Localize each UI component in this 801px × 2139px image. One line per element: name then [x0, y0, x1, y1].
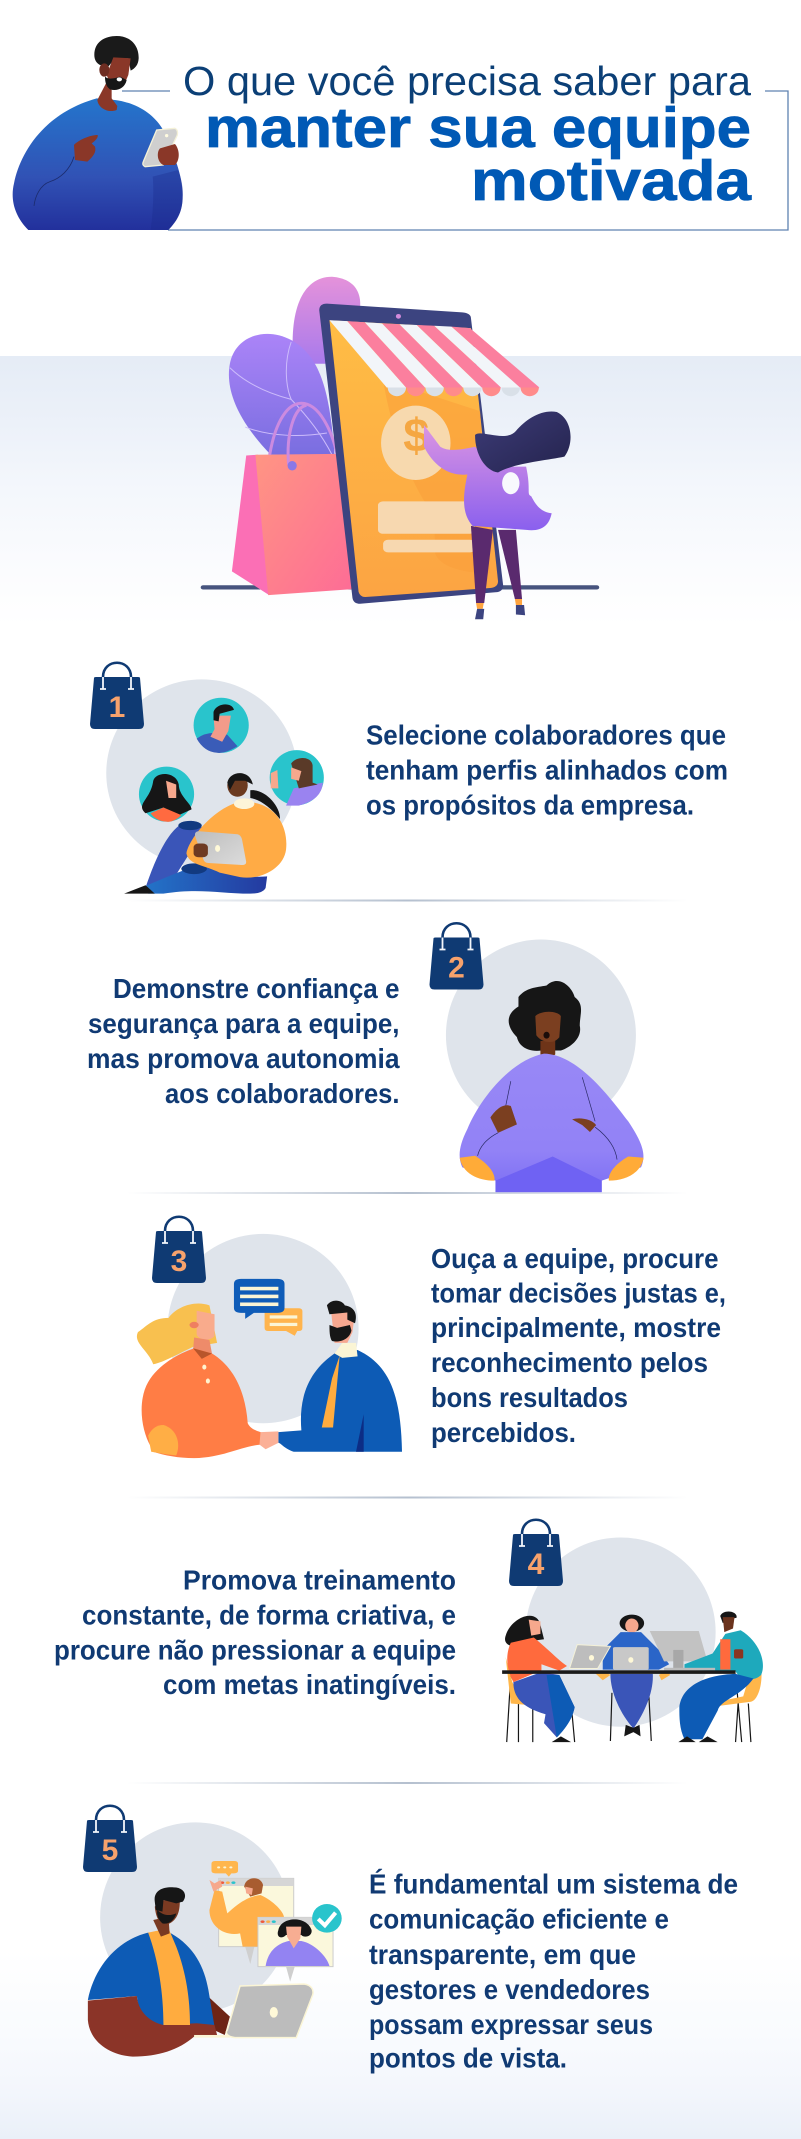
- background: top gradient band: [0, 356, 801, 626]
- step 4 text: procure não pressionar a equipe: [54, 1634, 456, 1666]
- step 1 text: os propósitos da empresa.: [366, 790, 694, 820]
- step 2 text: aos colaboradores.: [165, 1078, 400, 1109]
- title panel: [13, 36, 788, 230]
- hero illustration: online shop: [201, 277, 599, 619]
- coin: [381, 406, 451, 480]
- step 5 text: comunicação eficiente e: [369, 1904, 669, 1934]
- shopping bag: [232, 403, 352, 595]
- chat bubble: [211, 1861, 238, 1877]
- step 2 text: Demonstre confiança e: [113, 973, 400, 1004]
- step 3 text: [431, 1243, 726, 1448]
- pink leaf: [293, 277, 360, 364]
- divider 2: [127, 1192, 688, 1194]
- background: bottom gradient band: [0, 1950, 801, 2139]
- step 1 text: [366, 720, 728, 820]
- panel: step 1: [90, 663, 728, 894]
- panel: step 5: [83, 1806, 738, 2074]
- step 4 text: Promova treinamento: [183, 1564, 456, 1596]
- step 2 text: mas promova autonomia: [87, 1043, 400, 1074]
- step 1 text: tenham perfis alinhados com: [366, 754, 728, 786]
- purple leaf: [229, 334, 335, 455]
- step 4 text: com metas inatingíveis.: [163, 1669, 456, 1700]
- step 5 text: transparente, em que: [369, 1939, 636, 1970]
- step 5 text: É fundamental um sistema de: [369, 1868, 738, 1900]
- illustration: team at table: [502, 1537, 763, 1742]
- divider 3: [127, 1496, 688, 1498]
- phone storefront: [319, 304, 539, 604]
- icon: bag number 1: 1: [109, 691, 125, 724]
- icon: bag number 5: 5: [102, 1834, 118, 1867]
- step 3 text: principalmente, mostre: [431, 1312, 721, 1343]
- step 1 text: Selecione colaboradores que: [366, 720, 726, 750]
- ground line: [201, 585, 599, 590]
- panel: step 4: [54, 1520, 763, 1742]
- striped awning: [329, 320, 539, 396]
- step 2 text: segurança para a equipe,: [88, 1008, 400, 1039]
- icon: bag number 4: 4: [528, 1548, 545, 1581]
- illustration: team profiles: [106, 679, 324, 894]
- divider 4: [127, 1782, 688, 1784]
- screen cards: [378, 501, 475, 552]
- icon: bag number 2: 2: [448, 952, 465, 984]
- icon: bag number 2: [430, 923, 484, 990]
- speech bubbles: [234, 1279, 302, 1336]
- panel: step 3: [137, 1217, 726, 1458]
- step 4 text: constante, de forma criativa, e: [82, 1600, 456, 1630]
- title frame: [122, 91, 788, 230]
- illustration: video call: [88, 1822, 342, 2057]
- step 4 text: [54, 1564, 456, 1700]
- step 2 text: [87, 973, 400, 1109]
- illustration: man with phone: [13, 36, 183, 230]
- divider 1: [127, 900, 688, 902]
- woman touching screen: [424, 412, 571, 619]
- step 3 text: bons resultados: [431, 1382, 628, 1413]
- step 5 text: [369, 1868, 738, 2074]
- panel: step 2: [87, 923, 644, 1192]
- title line 2: manter sua equipe: [205, 96, 751, 160]
- icon: bag number 3: 3: [171, 1245, 187, 1278]
- step 3 text: tomar decisões justas e,: [431, 1278, 726, 1308]
- step 3 text: reconhecimento pelos: [431, 1347, 708, 1378]
- illustration: woman arms crossed: [446, 940, 644, 1192]
- coin: $: [403, 408, 429, 462]
- title line 3: motivada: [471, 149, 752, 213]
- illustration: handshake: [137, 1234, 402, 1458]
- step 5 text: gestores e vendedores: [369, 1974, 650, 2005]
- check badge: [312, 1904, 342, 1933]
- icon: bag number 4: [509, 1520, 563, 1586]
- title line 1: O que você precisa saber para: [183, 58, 751, 104]
- step 3 text: percebidos.: [431, 1417, 576, 1448]
- step 3 text: Ouça a equipe, procure: [431, 1243, 718, 1274]
- step 5 text: possam expressar seus: [369, 2009, 653, 2040]
- icon: bag number 1: [90, 663, 144, 729]
- icon: bag number 5: [83, 1806, 137, 1872]
- step 5 text: pontos de vista.: [369, 2042, 567, 2074]
- icon: bag number 3: [152, 1217, 206, 1283]
